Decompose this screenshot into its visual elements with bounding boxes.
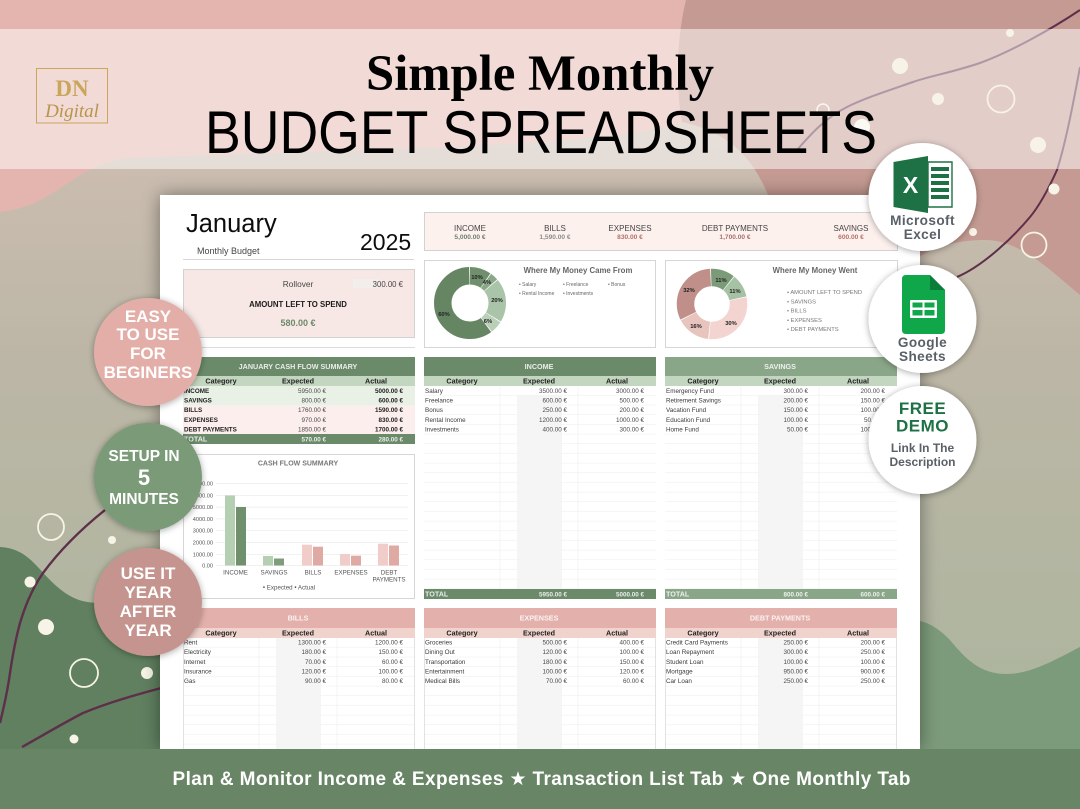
- bar chart: cash flow summary: 6000.00: [193, 493, 213, 499]
- table: expenses: Groceries: [425, 640, 452, 646]
- table: expenses: 120.00 €: [542, 649, 567, 656]
- bar chart: cash flow summary: SAVINGS: [260, 570, 288, 576]
- table: January cash flow summary: 280.00 €: [378, 436, 403, 444]
- table: savings: Retirement Savings: [666, 398, 721, 405]
- table: income: TOTAL: [425, 590, 449, 598]
- summary strip: 830.00 €: [617, 234, 643, 241]
- donut chart: where my money came from: • Salary: [519, 282, 537, 288]
- table: expenses: Medical Bills: [425, 678, 460, 685]
- table: January cash flow summary: 600.00 €: [378, 398, 403, 405]
- table: savings: 200.00 €: [860, 388, 885, 395]
- donut chart: where my money went: 16%: [690, 324, 702, 330]
- table: January cash flow summary: 1590.00 €: [375, 407, 403, 414]
- summary strip: [424, 212, 898, 250]
- table: debt payments: Mortgage: [666, 668, 693, 676]
- donut chart: where my money went: • SAVINGS: [787, 300, 816, 306]
- donut chart: where my money came from: 6%: [484, 319, 492, 325]
- summary strip: EXPENSES: [608, 224, 652, 233]
- badge: Microsoft Excel: [868, 143, 976, 251]
- table: savings: 100.00 €: [860, 407, 885, 414]
- badge: use it year after year: AFTER: [120, 602, 176, 621]
- bar chart: cash flow summary: 0.00: [202, 564, 213, 570]
- table: January cash flow summary: JANUARY CASH FLOW SUMMARY: [239, 362, 358, 371]
- badge: free demo: Description: [889, 455, 956, 469]
- table: expenses: 120.00 €: [619, 668, 644, 676]
- table: bills: 1200.00 €: [375, 640, 403, 646]
- bar chart: cash flow summary: INCOME: [223, 570, 248, 576]
- badge: use it year after year: YEAR: [124, 583, 172, 602]
- table: income: 3000.00 €: [616, 388, 644, 395]
- table: savings: 100.00 €: [783, 417, 808, 424]
- table: income: Rental Income: [425, 417, 466, 424]
- table: savings: Category: [687, 376, 719, 386]
- table: savings: [665, 357, 897, 599]
- table: expenses: Category: [446, 628, 478, 638]
- badge: easy to use: TO USE: [117, 325, 179, 344]
- table: savings: 150.00 €: [783, 407, 808, 414]
- table: bills: Gas: [184, 678, 196, 685]
- table: debt payments: Loan Repayment: [666, 649, 714, 656]
- bar chart: cash flow summary: • Expected • Actual: [263, 584, 315, 592]
- table: income: 300.00 €: [619, 426, 644, 434]
- table: January cash flow summary: TOTAL: [184, 434, 208, 444]
- table: bills: Internet: [184, 659, 206, 666]
- rollover box: Rollover: [283, 279, 313, 289]
- badge: free demo: Link In The: [891, 441, 954, 455]
- table: January cash flow summary: SAVINGS: [184, 398, 212, 405]
- badge: setup in 5 minutes: SETUP IN: [108, 448, 180, 465]
- table: expenses: 100.00 €: [542, 668, 567, 676]
- table: January cash flow summary: 1700.00 €: [375, 426, 403, 434]
- donut chart: where my money came from: • Freelance: [563, 282, 589, 288]
- bar chart: cash flow summary: BILLS: [305, 570, 321, 576]
- table: debt payments: 250.00 €: [783, 640, 808, 646]
- badge: easy to use: EASY: [125, 307, 172, 326]
- donut chart: where my money went: • DEBT PAYMENTS: [787, 327, 839, 333]
- table: income: 600.00 €: [542, 398, 567, 405]
- month heading: January: [186, 210, 277, 238]
- donut chart: where my money went: 30%: [725, 321, 737, 327]
- badge: use it year after year: USE IT: [121, 564, 176, 583]
- table: savings: Home Fund: [666, 426, 699, 434]
- table: January cash flow summary: BILLS: [184, 407, 202, 414]
- donut chart: where my money went: 11%: [729, 289, 741, 295]
- rollover box: AMOUNT LEFT TO SPEND: [249, 300, 347, 309]
- table: expenses: Transportation: [425, 659, 466, 666]
- table: income: INCOME: [525, 362, 554, 371]
- table: January cash flow summary: INCOME: [184, 388, 209, 395]
- table: January cash flow summary: [183, 357, 415, 444]
- title: [205, 46, 877, 166]
- table: bills: 100.00 €: [378, 668, 403, 676]
- table: income: 1000.00 €: [616, 417, 644, 424]
- icon: Excel: X: [903, 172, 919, 198]
- bar chart: cash flow summary: DEBT: [381, 570, 397, 576]
- table: January cash flow summary: Category: [205, 376, 237, 386]
- rollover box: [183, 270, 415, 348]
- table: bills: Insurance: [184, 668, 212, 676]
- table: January cash flow summary: Expected: [282, 376, 314, 386]
- table: bills: 70.00 €: [305, 659, 326, 666]
- table: income: [424, 357, 656, 599]
- table: expenses: 70.00 €: [546, 678, 567, 685]
- table: debt payments: 100.00 €: [860, 659, 885, 666]
- table: savings: SAVINGS: [764, 362, 796, 371]
- summary strip: DEBT PAYMENTS: [702, 224, 768, 233]
- summary strip: BILLS: [544, 224, 566, 233]
- table: income: Salary: [425, 388, 444, 395]
- bar chart: cash flow summary: 1000.00: [193, 552, 213, 558]
- bar chart: cash flow summary: CASH FLOW SUMMARY: [258, 460, 338, 468]
- table: savings: 300.00 €: [783, 388, 808, 395]
- table: bills: 120.00 €: [301, 668, 326, 676]
- table: bills: 1300.00 €: [298, 640, 326, 646]
- summary strip: 5,000.00 €: [454, 234, 486, 241]
- donut chart: where my money went: Where My Money Went: [773, 266, 858, 275]
- donut chart: where my money went: • AMOUNT LEFT TO SPEND: [787, 290, 862, 296]
- table: income: Actual: [606, 376, 628, 386]
- table: bills: 80.00 €: [382, 678, 403, 685]
- rollover box: 300.00 €: [373, 280, 404, 289]
- table: savings: 200.00 €: [783, 398, 808, 405]
- donut chart: where my money went: 11%: [715, 278, 727, 284]
- table: bills: Actual: [365, 628, 387, 638]
- table: expenses: Dining Out: [425, 649, 455, 656]
- table: savings: TOTAL: [666, 590, 690, 598]
- table: expenses: 180.00 €: [542, 659, 567, 666]
- donut chart: where my money came from: 4%: [483, 280, 491, 286]
- table: savings: Education Fund: [666, 417, 711, 424]
- table: bills: Expected: [282, 628, 314, 638]
- donut chart: where my money came from: 60%: [438, 312, 450, 318]
- table: expenses: 60.00 €: [623, 678, 644, 685]
- table: January cash flow summary: Actual: [365, 376, 387, 386]
- table: debt payments: 900.00 €: [860, 668, 885, 676]
- donut chart: where my money came from: 20%: [491, 298, 503, 304]
- table: expenses: Entertainment: [425, 668, 464, 676]
- month heading: Monthly Budget: [197, 246, 260, 256]
- rollover box: 580.00 €: [280, 318, 316, 328]
- table: savings: 100.00 €: [860, 426, 885, 434]
- table: debt payments: [665, 608, 897, 749]
- badge: use it year after year: YEAR: [124, 621, 172, 640]
- table: income: Investments: [425, 426, 459, 434]
- table: bills: Electricity: [184, 649, 212, 656]
- donut chart: where my money came from: • Bonus: [608, 282, 626, 288]
- donut chart: where my money came from: • Rental Income: [519, 291, 555, 297]
- table: January cash flow summary: 830.00 €: [378, 417, 403, 424]
- table: January cash flow summary: 570.00 €: [301, 436, 326, 444]
- table: savings: 50.00 €: [787, 426, 808, 434]
- table: bills: 90.00 €: [305, 678, 326, 685]
- badge: Google Sheets: Sheets: [899, 349, 946, 364]
- table: expenses: 150.00 €: [619, 659, 644, 666]
- badge: Google Sheets: [868, 265, 976, 373]
- table: debt payments: 250.00 €: [860, 678, 885, 685]
- icon: Google Sheets: [902, 275, 945, 334]
- table: income: 200.00 €: [619, 407, 644, 414]
- table: bills: Category: [205, 628, 237, 638]
- bar chart: cash flow summary: 3000.00: [193, 529, 213, 535]
- summary strip: INCOME: [454, 224, 486, 233]
- spreadsheet panel: [160, 195, 920, 749]
- table: debt payments: 200.00 €: [860, 640, 885, 646]
- donut chart: where my money went: [666, 260, 898, 348]
- badge: Microsoft Excel: Microsoft: [890, 213, 955, 228]
- donut chart: where my money came from: Where My Money Came From: [524, 266, 632, 275]
- logo: Digital: [44, 101, 99, 122]
- badge: easy to use: FOR: [130, 344, 166, 363]
- bar chart: cash flow summary: 2000.00: [193, 540, 213, 546]
- table: bills: Rent: [184, 640, 198, 646]
- table: bills: 150.00 €: [378, 649, 403, 656]
- table: debt payments: 950.00 €: [783, 668, 808, 676]
- table: income: Freelance: [425, 398, 453, 405]
- badge: setup in 5 minutes: 5: [138, 465, 150, 490]
- table: income: 5950.00 €: [539, 592, 567, 598]
- title: BUDGET SPREADSHEETS: [205, 99, 877, 166]
- table: debt payments: Category: [687, 628, 719, 638]
- donut chart: where my money went: • BILLS: [787, 308, 807, 314]
- table: income: 500.00 €: [619, 398, 644, 405]
- footer banner: [0, 749, 1080, 809]
- badge: setup in 5 minutes: MINUTES: [109, 491, 179, 508]
- table: debt payments: 250.00 €: [860, 649, 885, 656]
- badge: easy to use: BEGINERS: [104, 363, 192, 382]
- table: debt payments: Car Loan: [666, 678, 692, 685]
- table: expenses: 400.00 €: [619, 640, 644, 646]
- table: income: Bonus: [425, 407, 443, 414]
- table: expenses: 500.00 €: [542, 640, 567, 646]
- bar chart: cash flow summary: 5000.00: [193, 505, 213, 511]
- badge: free demo: FREE: [899, 399, 946, 418]
- badge: use it year after year: [94, 548, 202, 656]
- month heading: 2025: [360, 229, 411, 255]
- badge: Google Sheets: Google: [898, 335, 947, 350]
- bar chart: cash flow summary: EXPENSES: [334, 570, 368, 576]
- bar chart: cash flow summary: 7000.00: [193, 482, 213, 488]
- table: January cash flow summary: 5950.00 €: [298, 388, 326, 395]
- donut chart: where my money went: 32%: [683, 288, 695, 294]
- table: savings: 800.00 €: [783, 592, 808, 598]
- summary strip: 600.00 €: [838, 234, 864, 241]
- table: savings: 50.00 €: [864, 417, 885, 424]
- badge: free demo: DEMO: [896, 416, 949, 436]
- summary strip: 1,590.00 €: [539, 234, 571, 241]
- table: debt payments: Expected: [764, 628, 796, 638]
- table: income: 5000.00 €: [616, 592, 644, 598]
- bar chart: cash flow summary: [184, 454, 414, 598]
- badge: setup in 5 minutes: [94, 423, 202, 531]
- footer banner: Plan & Monitor Income & Expenses ★ Transaction List Tab ★ One Monthly Tab: [172, 769, 910, 790]
- table: expenses: Actual: [606, 628, 628, 638]
- table: debt payments: DEBT PAYMENTS: [750, 614, 810, 622]
- title: Simple Monthly: [366, 46, 714, 102]
- table: savings: Actual: [847, 376, 869, 386]
- table: expenses: 100.00 €: [619, 649, 644, 656]
- table: debt payments: Actual: [847, 628, 869, 638]
- table: savings: Vacation Fund: [666, 407, 707, 414]
- table: debt payments: Student Loan: [666, 659, 704, 666]
- table: savings: 600.00 €: [860, 592, 885, 598]
- table: savings: 150.00 €: [860, 398, 885, 405]
- badge: easy to use: [94, 298, 202, 406]
- bar chart: cash flow summary: 4000.00: [193, 517, 213, 523]
- table: debt payments: Credit Card Payments: [666, 640, 728, 646]
- donut chart: where my money came from: [424, 260, 656, 348]
- table: income: 3500.00 €: [539, 388, 567, 395]
- table: savings: Emergency Fund: [666, 388, 714, 395]
- table: January cash flow summary: 5000.00 €: [375, 388, 403, 395]
- table: January cash flow summary: EXPENSES: [184, 417, 218, 424]
- summary strip: 1,700.00 €: [719, 234, 751, 241]
- table: bills: [183, 608, 415, 749]
- badge: Microsoft Excel: Excel: [904, 227, 941, 242]
- table: bills: 180.00 €: [301, 649, 326, 656]
- table: January cash flow summary: DEBT PAYMENTS: [184, 426, 237, 434]
- table: bills: 60.00 €: [382, 659, 403, 666]
- table: January cash flow summary: 970.00 €: [301, 417, 326, 424]
- table: January cash flow summary: 1850.00 €: [298, 426, 326, 434]
- table: January cash flow summary: 1760.00 €: [298, 407, 326, 414]
- donut chart: where my money came from: • Investments: [563, 291, 594, 297]
- table: income: 250.00 €: [542, 407, 567, 414]
- bar chart: cash flow summary: PAYMENTS: [372, 576, 406, 584]
- table: income: 1200.00 €: [539, 417, 567, 424]
- table: bills: BILLS: [288, 614, 309, 622]
- table: expenses: [424, 608, 656, 749]
- summary strip: SAVINGS: [834, 224, 868, 233]
- table: debt payments: 100.00 €: [783, 659, 808, 666]
- table: savings: Expected: [764, 376, 796, 386]
- table: expenses: EXPENSES: [520, 614, 559, 622]
- table: expenses: Expected: [523, 628, 555, 638]
- month heading: [183, 210, 414, 260]
- logo: DN: [55, 76, 89, 101]
- table: debt payments: 250.00 €: [783, 678, 808, 685]
- table: income: 400.00 €: [542, 426, 567, 434]
- badge: free demo: [868, 386, 976, 494]
- donut chart: where my money went: • EXPENSES: [787, 318, 822, 324]
- table: January cash flow summary: 800.00 €: [301, 398, 326, 405]
- table: income: Category: [446, 376, 478, 386]
- logo: [36, 68, 108, 123]
- table: debt payments: 300.00 €: [783, 649, 808, 656]
- table: income: Expected: [523, 376, 555, 386]
- donut chart: where my money came from: 10%: [471, 275, 483, 281]
